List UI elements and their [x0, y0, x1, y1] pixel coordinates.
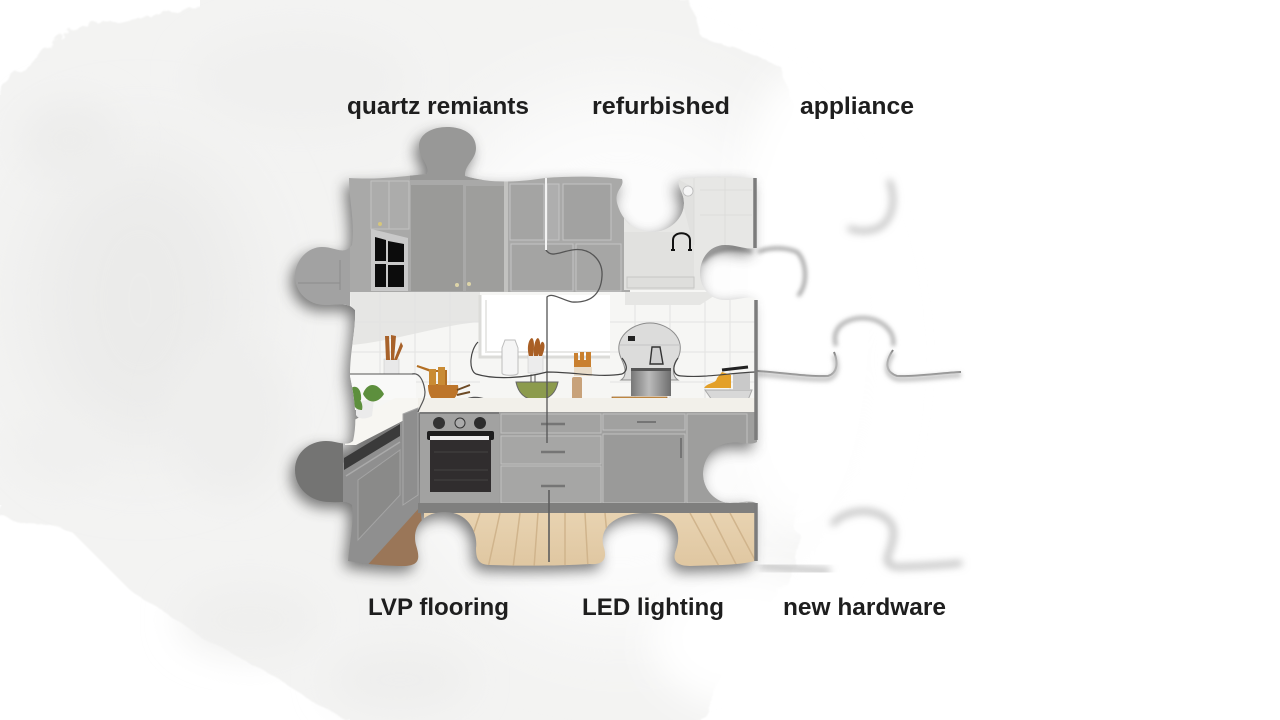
steel pot and board	[612, 368, 671, 398]
right blank puzzle piece	[702, 180, 962, 571]
spice bottle	[572, 377, 582, 400]
right edge seam of main piece	[755, 178, 756, 561]
wood floor	[368, 510, 754, 566]
label: LVP flooring: LVP flooring	[368, 594, 509, 621]
seam bulb: kettle panel	[619, 323, 680, 380]
oven	[420, 414, 499, 503]
utensil crock middle	[528, 338, 545, 373]
label: refurbished: refurbished	[592, 93, 730, 120]
icon: arch handle	[671, 233, 692, 250]
window	[480, 295, 610, 357]
green pot	[515, 374, 559, 398]
left counter and plant	[340, 374, 420, 445]
seam lines	[412, 178, 755, 562]
plate with food	[704, 367, 752, 400]
utensil crock left	[384, 335, 403, 374]
left lower knob	[295, 441, 343, 502]
notch: top	[848, 180, 893, 231]
main puzzle shadow	[291, 133, 753, 572]
label: new hardware: new hardware	[783, 594, 946, 621]
background: watercolor wash	[0, 0, 870, 720]
lower drawers and cabinets	[499, 412, 759, 504]
lower left cabinets and dishwasher	[340, 408, 420, 570]
upper right pale piece	[624, 170, 759, 305]
countertop	[418, 398, 758, 412]
upper cabinet window	[371, 229, 408, 291]
notch: middle	[835, 318, 893, 346]
backsplash items	[384, 323, 680, 380]
upper cabinets: left and centre	[290, 120, 630, 310]
notch: bottom	[832, 511, 962, 567]
notch: socket joining the main piece	[755, 245, 807, 302]
label: LED lighting: LED lighting	[582, 594, 724, 621]
main puzzle: kitchen scene	[290, 120, 765, 570]
labels: top row	[347, 93, 914, 120]
utensil crock right	[574, 352, 592, 376]
toe kick	[418, 503, 760, 513]
window jar	[502, 340, 518, 375]
stove, pots and pans	[416, 365, 753, 398]
wall tiles	[340, 285, 765, 410]
label: quartz remnants: quartz remiants	[347, 93, 529, 120]
labels: bottom row	[368, 594, 946, 621]
label: appliance: appliance	[800, 93, 914, 120]
